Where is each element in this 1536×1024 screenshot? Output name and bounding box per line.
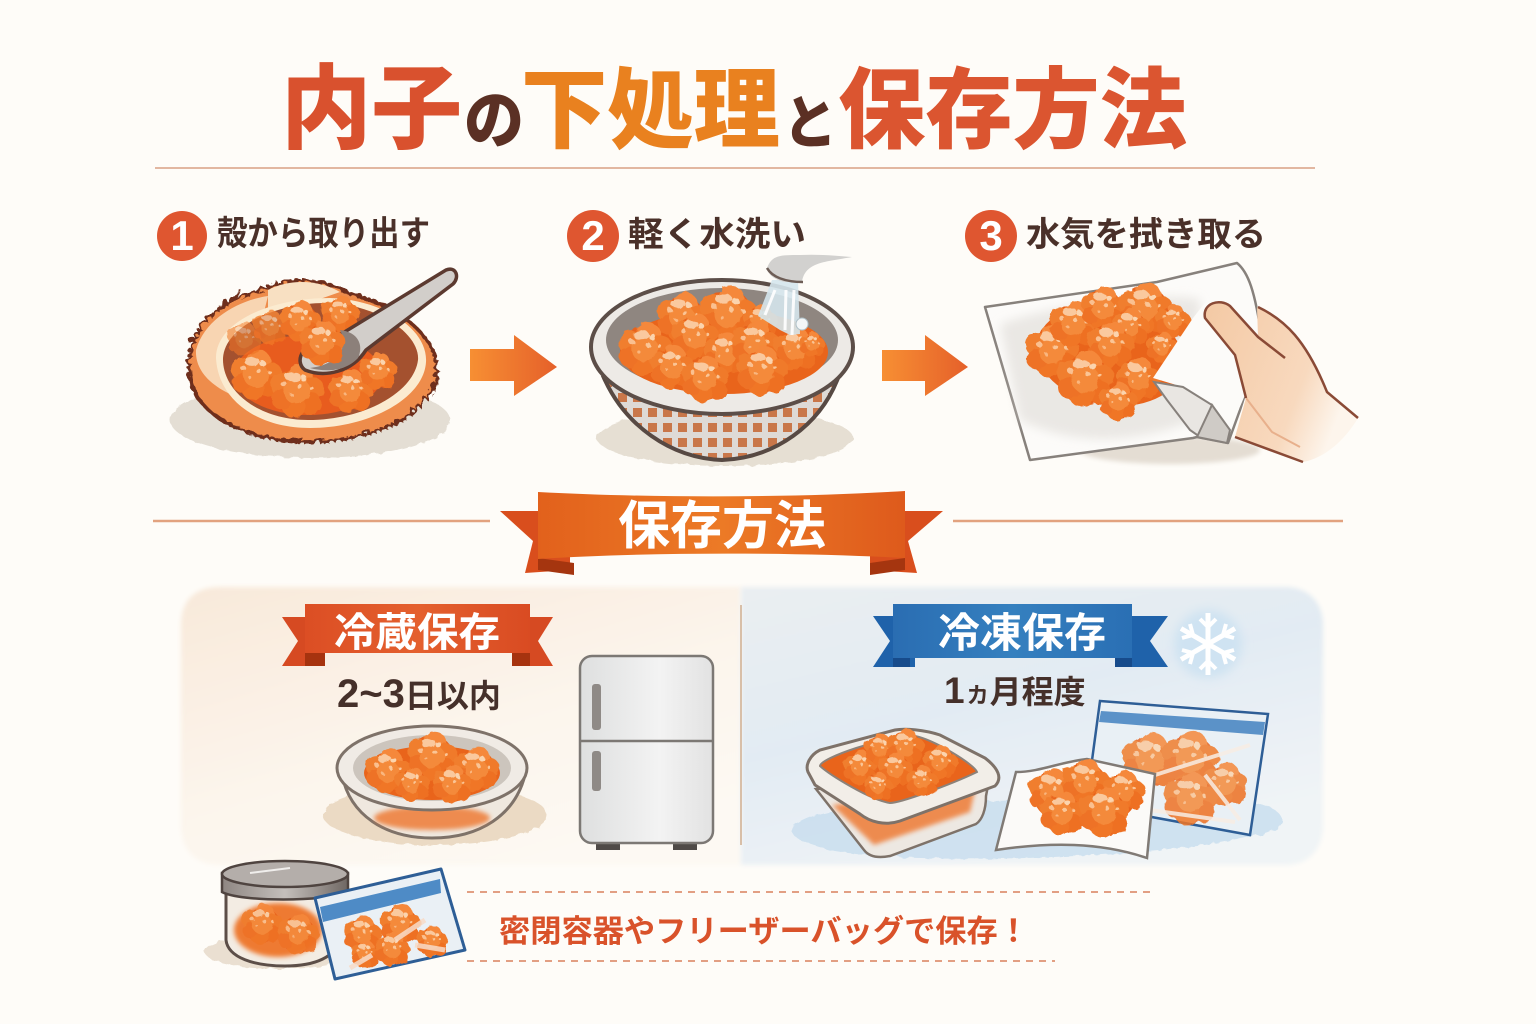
step 1 illustration: shell with spoon xyxy=(170,269,457,458)
faucet xyxy=(767,255,852,282)
step 1 heading xyxy=(157,211,430,261)
step 2 heading: 2 xyxy=(581,212,605,259)
frozen banner xyxy=(873,604,1168,667)
small freezer bag xyxy=(315,869,465,979)
colander rim xyxy=(591,280,853,414)
glass bowl xyxy=(323,726,547,845)
towel xyxy=(985,263,1262,460)
ice shadow xyxy=(792,793,1282,859)
refrigerated banner: 冷蔵保存 xyxy=(334,611,500,655)
step 3 heading xyxy=(965,210,1266,262)
colander body xyxy=(604,378,838,460)
title: と xyxy=(783,91,837,156)
step 2 illustration: colander and water xyxy=(591,255,853,466)
jar xyxy=(205,861,355,969)
panel: refrigerated xyxy=(181,587,741,865)
icon: snowflake xyxy=(1174,610,1242,678)
freezer bag xyxy=(1086,701,1268,835)
title: 保存方法 xyxy=(838,61,1187,160)
title: の xyxy=(464,85,524,157)
step 3 illustration: paper towel and hand xyxy=(985,263,1358,464)
title: 下処理 xyxy=(521,61,780,160)
arrow 1 xyxy=(470,335,557,396)
step 1 heading: 1 xyxy=(170,212,194,259)
refrigerated banner xyxy=(282,604,553,666)
step 3 heading: 3 xyxy=(979,212,1003,259)
step 2 heading xyxy=(567,210,806,262)
shell xyxy=(186,277,434,438)
panel: frozen xyxy=(741,587,1323,865)
step 3 heading: 水気を拭き取る xyxy=(1026,216,1266,254)
water xyxy=(758,280,800,335)
refrigerator xyxy=(580,656,713,850)
towel fold xyxy=(1153,290,1260,430)
section banner: 保存方法 xyxy=(618,498,826,556)
step 2 heading: 軽く水洗い xyxy=(628,216,806,254)
title xyxy=(281,59,1187,161)
arrow 2 xyxy=(882,335,968,396)
title: 内子 xyxy=(281,59,462,161)
frozen banner: 冷凍保存 xyxy=(938,610,1106,656)
hand xyxy=(1205,302,1358,462)
refrigerated duration: 2~3日以内 xyxy=(337,672,501,716)
frozen duration: 1カ月程度 xyxy=(944,670,1086,711)
section banner xyxy=(500,491,943,575)
spoon xyxy=(300,269,457,373)
frozen container xyxy=(807,729,999,857)
paper with meat xyxy=(996,759,1155,858)
step 1 heading: 殻から取り出す xyxy=(217,215,430,253)
note: 密閉容器やフリーザーバッグで保存！ xyxy=(499,914,1029,949)
